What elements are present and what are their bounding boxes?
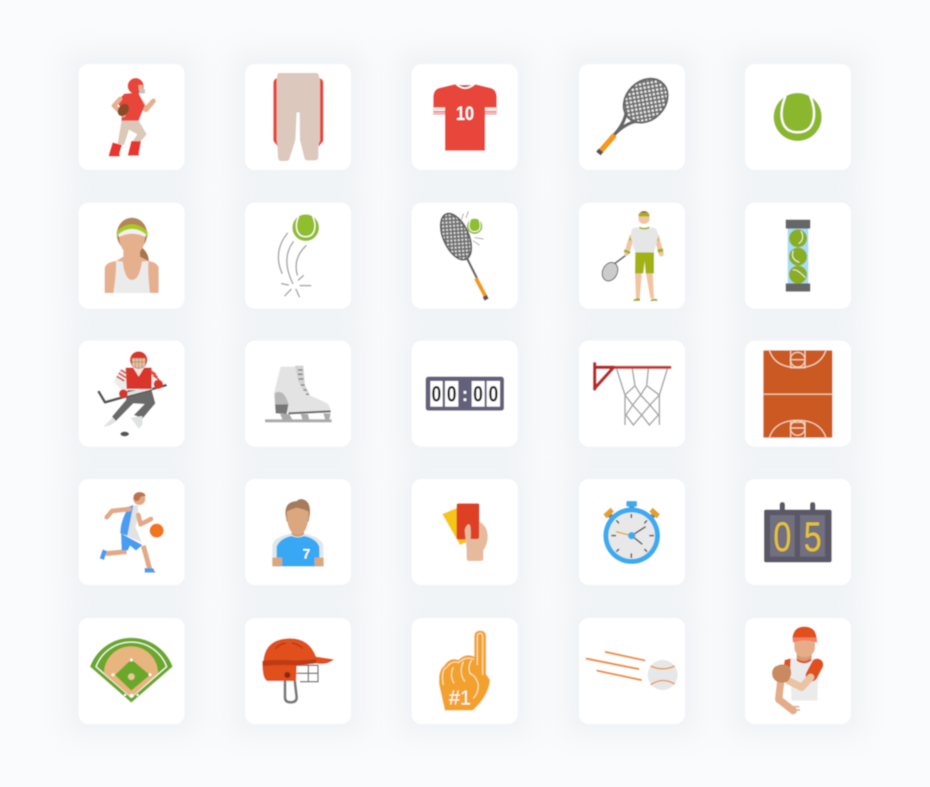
row 1 left: player, pants, jersey, row 2 left: woman, ball trail, racket hit bbox=[79, 64, 518, 309]
card: timer scoreboard 00:00 bbox=[412, 341, 518, 447]
card: tube of tennis balls bbox=[745, 203, 851, 309]
card: timer scoreboard 00:00: 0 bbox=[447, 383, 457, 407]
card: hockey player bbox=[79, 341, 185, 447]
row 5 left: baseball diamond, batting helmet, foam finger bbox=[79, 618, 518, 724]
row 5 right: flying baseball, pitcher bbox=[579, 618, 851, 724]
card: basketball court bbox=[745, 341, 851, 447]
card: basketball hoop bbox=[579, 341, 685, 447]
card: soccer player number 7: 7 bbox=[302, 545, 310, 561]
card: ice skate bbox=[245, 341, 351, 447]
card: tennis ball flight trail bbox=[245, 203, 351, 309]
card: tennis player with racket bbox=[579, 203, 685, 309]
card: timer scoreboard 00:00: 0 bbox=[431, 383, 441, 407]
card: basketball player bbox=[79, 479, 185, 585]
card: red jersey number 10: 10 bbox=[456, 104, 474, 125]
card: tennis racket bbox=[579, 64, 685, 170]
card: digital scoreboard 05 bbox=[745, 479, 851, 585]
card: referee hand with red and yellow cards bbox=[412, 479, 518, 585]
row 3 and 4 right: hoop, court, stopwatch, digital scoreboard bbox=[579, 341, 851, 585]
card: foam finger #1 bbox=[412, 618, 518, 724]
card: badminton style racket hitting ball bbox=[412, 203, 518, 309]
card: timer scoreboard 00:00: : bbox=[462, 385, 468, 406]
card: digital scoreboard 05: 0 bbox=[773, 513, 791, 560]
row 3 and 4 left: hockey player, skate, scoreboard, basketball player, soccer player, cards bbox=[79, 341, 518, 585]
card: soccer player number 7 bbox=[245, 479, 351, 585]
card: digital scoreboard 05: 5 bbox=[804, 513, 822, 560]
icon set wrapper bbox=[79, 64, 851, 724]
card: timer scoreboard 00:00: 0 bbox=[488, 383, 498, 407]
card: red jersey number 10 bbox=[412, 64, 518, 170]
row 1 and 2 right: tennis racket, tennis ball, tennis player, ball tube bbox=[579, 64, 851, 309]
card: baseball diamond bbox=[79, 618, 185, 724]
card: timer scoreboard 00:00: 0 bbox=[473, 383, 483, 407]
card: flying baseball bbox=[579, 618, 685, 724]
card: stopwatch bbox=[579, 479, 685, 585]
card: foam finger #1: #1 bbox=[449, 688, 471, 710]
card: woman with headband bbox=[79, 203, 185, 309]
card: tennis ball bbox=[745, 64, 851, 170]
card: baseball pitcher bbox=[745, 618, 851, 724]
card: football player bbox=[79, 64, 185, 170]
card: batting helmet bbox=[245, 618, 351, 724]
card: football pants bbox=[245, 64, 351, 170]
